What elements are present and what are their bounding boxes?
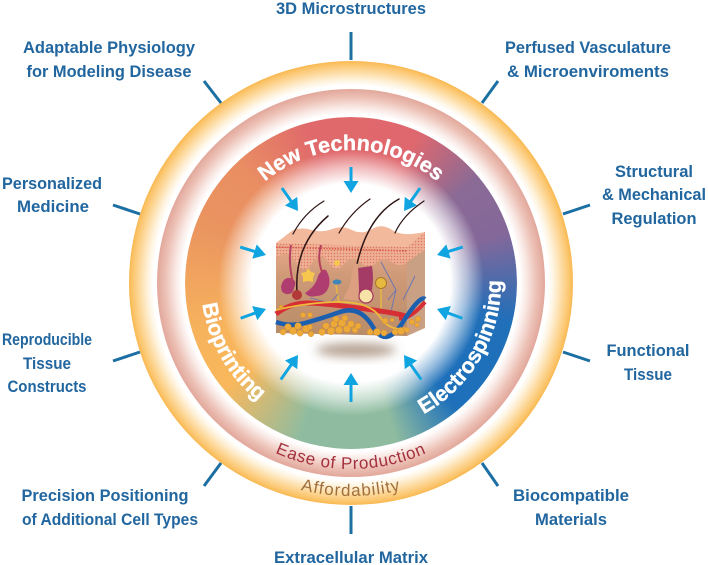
label: Structural and Mechanical Regulation: Regulation bbox=[612, 210, 696, 228]
label: Perfused Vasculature: Perfused Vasculature bbox=[505, 39, 671, 57]
label: Structural and Mechanical Regulation: & Mechanical bbox=[602, 186, 706, 204]
label: Adaptable Physiology: Adaptable Physiology bbox=[23, 39, 196, 57]
label: Precision Positioning: Precision Positioning bbox=[22, 487, 188, 505]
hair bulb bbox=[292, 290, 302, 300]
label: Reproducible Tissue Constructs: Constructs bbox=[8, 378, 86, 396]
yellow nerve endings bbox=[301, 260, 340, 282]
glands bbox=[281, 278, 295, 294]
label: Biocompatible Materials: Materials bbox=[535, 511, 607, 529]
inward arrows bbox=[238, 167, 465, 402]
label: Precision Positioning bbox=[22, 487, 198, 529]
dermis stripe bbox=[276, 247, 407, 251]
nerves and capillaries bbox=[310, 262, 415, 316]
block shadow bbox=[316, 343, 396, 357]
label: Precision Positioning: of Additional Cell Types bbox=[22, 511, 198, 529]
fat layer bbox=[279, 305, 421, 337]
block top surface bbox=[276, 226, 425, 247]
block right side bbox=[407, 232, 425, 336]
label: Structural and Mechanical Regulation bbox=[602, 163, 706, 228]
label: Reproducible Tissue Constructs: Reproducible bbox=[2, 331, 92, 349]
label: Adaptable Physiology bbox=[23, 39, 196, 81]
label: Functional Tissue: Functional bbox=[606, 342, 690, 360]
label: Reproducible Tissue Constructs: Tissue bbox=[23, 355, 71, 373]
hairs bbox=[293, 199, 424, 292]
blood vessels bbox=[276, 303, 406, 318]
ring label: Affordability: Affordability bbox=[300, 480, 398, 496]
label: Biocompatible Materials: Biocompatible bbox=[513, 487, 629, 505]
label: Adaptable Physiology: for Modeling Disease bbox=[26, 63, 192, 81]
label: Perfused Vasculature bbox=[505, 39, 671, 81]
label: Perfused Vasculature: & Microenviroments bbox=[507, 63, 669, 81]
epidermis dotted band bbox=[276, 243, 407, 269]
heading: Bioprinting: Bioprinting bbox=[202, 302, 265, 402]
ring label: Ease of Production: Ease of Production bbox=[276, 442, 426, 469]
label: Reproducible Tissue Constructs bbox=[2, 331, 92, 396]
label: Personalized Medicine: Medicine bbox=[17, 198, 89, 216]
block front face bbox=[276, 243, 407, 336]
label: Personalized Medicine bbox=[2, 175, 102, 216]
heading: New Technologies: New Technologies bbox=[256, 134, 442, 181]
middle ring: ease of production bbox=[157, 89, 545, 477]
skin cross-section illustration bbox=[276, 199, 425, 357]
label: Functional Tissue bbox=[606, 342, 690, 384]
tick marks bbox=[113, 32, 590, 534]
label: Biocompatible Materials bbox=[513, 487, 629, 529]
follicle bbox=[343, 263, 359, 301]
label: Structural and Mechanical Regulation: Structural bbox=[615, 163, 693, 181]
heading: Electrospinning: Electrospinning bbox=[416, 281, 506, 414]
label: Personalized Medicine: Personalized bbox=[2, 175, 102, 193]
label: Functional Tissue: Tissue bbox=[624, 366, 672, 384]
colour wheel: technologies bbox=[185, 117, 517, 449]
label: 3D Microstructures: 3D Microstructures bbox=[276, 0, 426, 18]
outer ring: affordability bbox=[129, 61, 573, 505]
